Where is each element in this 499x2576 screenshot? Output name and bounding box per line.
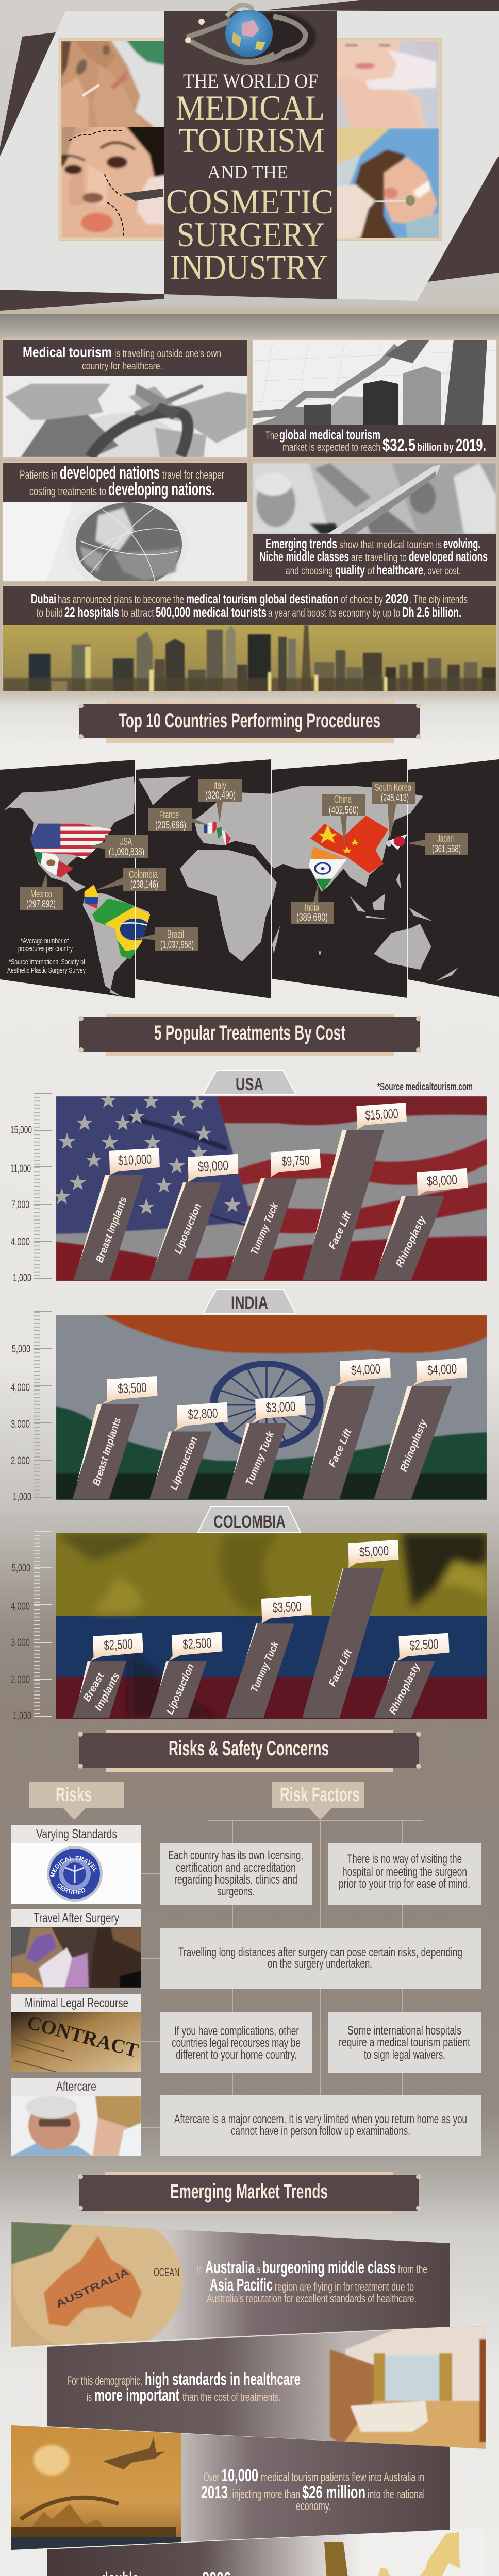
text: developed to developing nations: costing treatments to bbox=[29, 485, 106, 498]
tab: Colombia: COLOMBIA bbox=[213, 1512, 286, 1532]
bars and price tags: India bbox=[73, 1358, 467, 1499]
callout tails bbox=[41, 802, 425, 940]
text band bbox=[253, 534, 496, 581]
callout: Brazil: (1,037,958) bbox=[160, 939, 194, 951]
ruler axis: 7,000 bbox=[11, 1199, 29, 1211]
risks tab bbox=[29, 1782, 124, 1820]
text: market forecast: $32.5 bbox=[382, 435, 415, 454]
map flags bbox=[29, 802, 425, 960]
text: developed to developing nations: developed nations bbox=[60, 463, 160, 483]
text: For this demographic, bbox=[67, 2374, 142, 2388]
tab: Colombia bbox=[198, 1507, 301, 1532]
photo: injection in face bbox=[61, 41, 164, 127]
tab: USA: USA bbox=[236, 1075, 263, 1094]
text: burgeoning middle class bbox=[262, 2258, 396, 2277]
callout: Italy: (320,490) bbox=[205, 790, 236, 801]
bar: Rhinoplasty bbox=[374, 1633, 450, 1718]
bar and price labels: India: Liposuction bbox=[168, 1435, 200, 1492]
bar: Liposuction bbox=[149, 1632, 222, 1718]
title line: THE WORLD OF bbox=[183, 70, 318, 92]
text: Dubai plans: to attract bbox=[121, 606, 154, 619]
tab: India: INDIA bbox=[231, 1293, 268, 1313]
callout: India: (389,680) bbox=[296, 912, 328, 923]
bar and price labels: USA: $10,000 bbox=[118, 1151, 152, 1168]
text: medical tourism definition: is travelling outside one's own bbox=[114, 348, 221, 360]
text: Australia bbox=[205, 2258, 255, 2277]
text: market forecast: The bbox=[265, 429, 278, 442]
bar: Face Lift bbox=[302, 1358, 391, 1499]
text: Dubai plans: 22 hospitals bbox=[64, 604, 119, 620]
map notes bbox=[7, 937, 86, 975]
text: Dubai plans: a year and boost its economy by up to bbox=[268, 606, 400, 619]
banner bbox=[11, 2222, 450, 2347]
panel frame bbox=[2, 338, 248, 459]
shadow band below header bbox=[0, 314, 499, 338]
flag: USA bbox=[30, 823, 111, 859]
bar and price labels: USA: Breast Implants bbox=[94, 1195, 129, 1264]
header bbox=[0, 0, 499, 311]
factor: visiting bbox=[328, 1843, 481, 1905]
text: 2013 bbox=[201, 2483, 228, 2502]
text: , injecting more than bbox=[228, 2487, 300, 2501]
risk: aftercare: Aftercare bbox=[56, 2079, 96, 2094]
heading: 5 popular treatments: 5 Popular Treatments By Cost bbox=[154, 1022, 345, 1044]
image: Sydney sunset with plane bbox=[11, 2421, 181, 2555]
bar and price labels: Colombia: Tummy Tuck bbox=[248, 1639, 281, 1694]
text: emerging trends detail: , over cost. bbox=[423, 565, 461, 577]
title line: MEDICAL bbox=[176, 88, 325, 127]
tab: India bbox=[203, 1289, 296, 1313]
text: Dubai plans: Dh 2.6 billion. bbox=[402, 604, 461, 620]
bar and price labels: Colombia: Liposuction bbox=[164, 1662, 196, 1716]
map notes: *Average number of bbox=[21, 937, 69, 945]
bar: Breast Implants bbox=[73, 1633, 143, 1718]
factor: complications: If you have complications, other bbox=[174, 2024, 299, 2038]
callout: Colombia: Colombia bbox=[129, 869, 158, 880]
text: market forecast: billion by bbox=[417, 440, 454, 453]
text: emerging trends detail bbox=[259, 536, 488, 578]
bar and price labels: Colombia: $5,000 bbox=[359, 1543, 389, 1560]
text: emerging trends detail: and choosing bbox=[286, 565, 333, 577]
flag photo: USA bbox=[56, 1096, 487, 1281]
title text bbox=[166, 70, 334, 286]
text: emerging trends detail: healthcare bbox=[376, 562, 423, 578]
map notes: procedures per country bbox=[18, 944, 73, 953]
text: is bbox=[87, 2391, 92, 2403]
factor: licensing: Each country has its own licensing, bbox=[168, 1849, 303, 1862]
image: Dubai skyline bbox=[3, 625, 496, 691]
bar and price labels: USA: $9,750 bbox=[281, 1153, 310, 1169]
risks tab: Risks bbox=[56, 1784, 92, 1806]
bar and price labels: India: $3,500 bbox=[118, 1380, 147, 1396]
fold gaps bbox=[136, 757, 407, 999]
text bbox=[67, 2369, 301, 2404]
bar and price labels: India: Face Lift bbox=[327, 1427, 354, 1469]
flag: China bbox=[309, 815, 390, 874]
ruler axis: 1,000 bbox=[13, 1272, 31, 1284]
map notes: *Source International Society of bbox=[9, 958, 86, 967]
image: contract document: CONTRACT bbox=[25, 2011, 141, 2062]
callout: China: China bbox=[334, 794, 352, 805]
ruler axis: 11,000 bbox=[10, 1163, 31, 1175]
risk factor boxes bbox=[160, 1843, 481, 2156]
chart: India bbox=[11, 1289, 487, 1503]
bar and price labels: USA: $8,000 bbox=[426, 1172, 458, 1189]
ruler axis: 1,000 bbox=[13, 1491, 31, 1503]
ruler axis bbox=[11, 1531, 52, 1722]
ruler axis bbox=[11, 1312, 52, 1503]
text: economy. bbox=[296, 2499, 331, 2513]
heading: top 10 countries bbox=[78, 701, 421, 743]
text: emerging trends detail: Emerging trends bbox=[265, 536, 337, 551]
map notes: Aesthetic Plastic Surgery Survey bbox=[7, 966, 86, 975]
map continents bbox=[3, 776, 458, 996]
panel frame bbox=[252, 461, 497, 582]
title panel bbox=[164, 11, 337, 299]
trend 4: double the number bbox=[47, 2532, 460, 2576]
flag: Italy bbox=[217, 827, 231, 845]
callout: Brazil: Brazil bbox=[167, 929, 184, 940]
callout: South Korea bbox=[372, 782, 415, 804]
heading: emerging market trends bbox=[78, 2172, 421, 2214]
factor: legal waivers bbox=[328, 2012, 481, 2073]
trend 2: high standards bbox=[47, 2326, 486, 2449]
text: Dubai plans bbox=[31, 591, 468, 620]
image: rising bar chart bbox=[253, 340, 496, 425]
text: Dubai plans: to build bbox=[37, 606, 63, 619]
bar and price labels: Colombia: Face Lift bbox=[327, 1647, 355, 1688]
text: Dubai plans: 2020 bbox=[385, 591, 408, 606]
banner bbox=[11, 2425, 450, 2550]
image: globe showing Australia: OCEAN bbox=[154, 2266, 179, 2279]
text: market forecast: global medical tourism bbox=[279, 427, 380, 443]
text: market forecast bbox=[265, 427, 486, 454]
panel: emerging trends bbox=[252, 461, 497, 582]
risk: travel after surgery: Travel After Surgery bbox=[34, 1911, 119, 1925]
text band bbox=[253, 425, 496, 457]
factor: aftercare bbox=[160, 2095, 481, 2156]
text band bbox=[3, 463, 247, 502]
risk: varying standards bbox=[11, 1825, 141, 1904]
text: In bbox=[196, 2263, 203, 2276]
callout: Japan: (361,568) bbox=[432, 843, 461, 855]
callout: Japan bbox=[425, 833, 468, 855]
image: rising gold arrow chart bbox=[324, 2532, 460, 2576]
ruler axis: 4,000 bbox=[11, 1236, 30, 1248]
heading: risks and safety bbox=[78, 1730, 421, 1772]
text: than the cost of treatments. bbox=[182, 2391, 281, 2403]
bar and price labels: Colombia: $2,500 bbox=[182, 1635, 212, 1652]
text: Dubai plans: 500,000 medical tourists bbox=[156, 604, 267, 620]
text: $26 million bbox=[302, 2483, 365, 2502]
ruler axis: 4,000 bbox=[11, 1601, 30, 1613]
icon: medical travel certified seal: CERTIFIED bbox=[57, 1884, 86, 1894]
flag: France bbox=[204, 822, 217, 834]
bar: Tummy Tuck bbox=[226, 1595, 312, 1718]
text: 10,000 bbox=[221, 2466, 258, 2485]
ruler axis: 5,000 bbox=[12, 1343, 30, 1355]
text: emerging trends detail: show that medical tourism is bbox=[339, 539, 442, 551]
panel frame bbox=[252, 338, 497, 459]
flag: Colombia bbox=[85, 885, 99, 909]
factor: complications bbox=[160, 2012, 312, 2073]
photo: face with surgical marks bbox=[61, 127, 164, 238]
factor: licensing bbox=[160, 1843, 312, 1905]
callout: USA bbox=[105, 835, 148, 858]
bar and price labels: USA: Face Lift bbox=[327, 1209, 354, 1251]
bar and price labels: USA: Rhinoplasty bbox=[394, 1214, 428, 1269]
bars and price tags: USA bbox=[73, 1103, 468, 1280]
text: developed to developing nations: travel for cheaper bbox=[162, 468, 224, 481]
callout: France: France bbox=[159, 809, 179, 821]
risk factors tab: Risk Factors bbox=[280, 1784, 360, 1806]
callout: Colombia: (238,146) bbox=[130, 879, 158, 890]
text: emerging trends detail: Niche middle classes bbox=[259, 549, 349, 564]
text: more important bbox=[94, 2385, 179, 2404]
tab: USA bbox=[203, 1071, 296, 1094]
title line: TOURISM bbox=[178, 121, 325, 160]
risk: aftercare bbox=[11, 2078, 141, 2156]
text: market forecast: 2019. bbox=[456, 435, 486, 454]
bar and price labels: USA: $9,000 bbox=[197, 1157, 229, 1175]
callout: South Korea: (248,413) bbox=[381, 792, 409, 804]
ruler axis: 4,000 bbox=[11, 1382, 30, 1394]
risk: minimal legal recourse bbox=[11, 1994, 141, 2072]
factor: complications: countries legal recourses may be bbox=[172, 2036, 301, 2050]
bar and price labels: India: Tummy Tuck bbox=[243, 1430, 277, 1487]
bar: Rhinoplasty bbox=[374, 1358, 467, 1499]
ruler axis: 1,000 bbox=[13, 1710, 31, 1722]
trend 3: patient numbers bbox=[11, 2421, 450, 2555]
title line: SURGERY bbox=[177, 215, 325, 254]
title line: AND THE bbox=[207, 162, 288, 182]
callout: India bbox=[291, 902, 334, 924]
panel frame bbox=[2, 585, 497, 692]
image: globe showing Australia: AUSTRALIA bbox=[54, 2266, 131, 2311]
callout: Colombia bbox=[123, 868, 166, 891]
flag photo: Colombia bbox=[56, 1533, 487, 1719]
bar and price labels: India: $4,000 bbox=[351, 1361, 381, 1378]
callout: Italy bbox=[198, 779, 242, 802]
bar and price labels: India bbox=[91, 1361, 457, 1492]
text bbox=[201, 2466, 425, 2513]
callout: South Korea: South Korea bbox=[375, 782, 412, 793]
ruler axis: 5,000 bbox=[12, 1562, 30, 1574]
text: Dubai plans: of choice by bbox=[341, 592, 383, 606]
text: developed to developing nations bbox=[20, 463, 224, 499]
bar: Tummy Tuck bbox=[226, 1149, 321, 1280]
bar and price labels: Colombia: $2,500 bbox=[104, 1636, 133, 1653]
bar: Face Lift bbox=[302, 1540, 398, 1718]
text: into the national bbox=[368, 2487, 425, 2501]
world map: top 10 countries bbox=[0, 757, 499, 999]
text: market forecast: market is expected to reach bbox=[282, 442, 380, 453]
risk: travel after surgery bbox=[11, 1909, 141, 1988]
text: emerging trends detail: of bbox=[367, 565, 375, 577]
factor: licensing: certification and accreditation bbox=[176, 1861, 296, 1875]
text: Dubai plans: . The city intends bbox=[409, 592, 468, 606]
factor: aftercare: cannot have in person follow up examinations. bbox=[231, 2124, 410, 2138]
heading: emerging market trends: Emerging Market Trends bbox=[170, 2180, 328, 2203]
bar and price labels: Colombia: Implants bbox=[93, 1671, 122, 1713]
bar and price labels: India: $2,800 bbox=[188, 1405, 218, 1422]
heading: 5 popular treatments bbox=[78, 1014, 421, 1056]
text: Dubai plans: Dubai bbox=[31, 591, 56, 606]
flag photo: India bbox=[56, 1315, 487, 1500]
bar and price labels: Colombia: $2,500 bbox=[409, 1636, 439, 1653]
callout: Italy: Italy bbox=[213, 780, 226, 791]
bar and price labels: USA: Tummy Tuck bbox=[248, 1201, 281, 1257]
flag: Japan bbox=[388, 834, 407, 850]
callout: Mexico: Mexico bbox=[30, 889, 52, 900]
bar and price labels: USA bbox=[94, 1106, 458, 1269]
icon: medical travel certified seal: MEDICAL TRAVEL bbox=[50, 1856, 97, 1877]
text: medical tourism definition: country for healthcare. bbox=[82, 361, 162, 372]
photo frame bbox=[59, 38, 442, 241]
text: Over bbox=[204, 2470, 219, 2484]
text: developed to developing nations: developing nations. bbox=[108, 480, 215, 499]
callout: France: (205,696) bbox=[155, 820, 186, 831]
factor: long distance travel: on the surgery undertaken. bbox=[268, 1957, 372, 1971]
text: Dubai plans: has announced plans to become the bbox=[58, 592, 184, 606]
callout: USA: USA bbox=[119, 836, 132, 848]
image: hospital room bbox=[330, 2326, 486, 2449]
bar and price labels: Colombia bbox=[81, 1543, 439, 1716]
ruler axis bbox=[10, 1093, 52, 1284]
risk: varying standards: Varying Standards bbox=[36, 1827, 117, 1841]
chart: USA bbox=[10, 1071, 487, 1284]
icon: globe with stethoscope bbox=[185, 5, 316, 63]
factor: legal waivers: to sign legal waivers. bbox=[364, 2048, 445, 2062]
bar and price labels: India: $3,000 bbox=[265, 1399, 296, 1416]
bar and price labels: USA: Liposuction bbox=[172, 1202, 204, 1256]
bar: Rhinoplasty bbox=[374, 1168, 468, 1280]
text: Dubai plans: medical tourism global destination bbox=[186, 591, 339, 606]
flag: Brazil bbox=[91, 897, 151, 960]
bar and price labels: USA: $15,000 bbox=[365, 1106, 398, 1123]
ruler axis: 3,000 bbox=[11, 1418, 30, 1430]
callout: Japan: Japan bbox=[437, 833, 454, 844]
callout: China: (402,560) bbox=[329, 805, 359, 816]
bar: Breast Implants bbox=[73, 1376, 158, 1499]
bar and price labels: India: Breast Implants bbox=[91, 1416, 123, 1487]
text: from the bbox=[398, 2263, 427, 2276]
text band bbox=[3, 340, 247, 376]
bar: Breast Implants bbox=[73, 1148, 160, 1280]
photo: patient at dentist bbox=[337, 128, 439, 238]
ruler axis: 2,000 bbox=[11, 1455, 30, 1467]
image: globe showing Australia bbox=[11, 2222, 183, 2347]
callout: China bbox=[322, 794, 365, 816]
bar: Liposuction bbox=[149, 1402, 228, 1499]
image: globe coin bbox=[3, 502, 247, 581]
factor: complications: different to your home country. bbox=[176, 2048, 297, 2062]
text bbox=[196, 2258, 427, 2305]
factor: licensing: regarding hospitals, clinics and bbox=[174, 1873, 297, 1887]
panel: Dubai bbox=[2, 585, 497, 692]
image: doctor with senior patient bbox=[11, 2096, 141, 2156]
bar and price labels: Colombia: Breast bbox=[81, 1670, 107, 1703]
text: Australia's reputation for excellent standards of healthcare. bbox=[207, 2292, 417, 2305]
image: surgeon with mask bbox=[11, 1927, 141, 1988]
panel: market growth bbox=[252, 338, 497, 459]
chart: Colombia bbox=[11, 1507, 487, 1722]
factor: long distance travel bbox=[160, 1928, 481, 1989]
photo: woman receiving facial treatment bbox=[337, 41, 439, 128]
bars and price tags: Colombia bbox=[73, 1540, 450, 1718]
header: light angled panel bbox=[0, 11, 499, 301]
ruler axis: 3,000 bbox=[11, 1637, 30, 1649]
bar and price labels: Colombia: Rhinoplasty bbox=[387, 1661, 423, 1716]
callout: India: India bbox=[305, 902, 320, 913]
icon: medical travel certified seal bbox=[47, 1846, 103, 1902]
text: a bbox=[256, 2263, 260, 2276]
text: high standards in healthcare bbox=[145, 2369, 301, 2388]
banner bbox=[47, 2326, 486, 2449]
image: world map with plane bbox=[3, 376, 247, 457]
callout: USA: (1,090,838) bbox=[109, 846, 144, 858]
flag: Mexico bbox=[34, 851, 73, 878]
bar and price labels: Colombia: $3,500 bbox=[272, 1599, 302, 1615]
panel: what is medical tourism bbox=[2, 338, 248, 576]
callout: France bbox=[148, 808, 192, 831]
ruler axis: 15,000 bbox=[10, 1124, 32, 1136]
factor: legal waivers: Some international hospitals bbox=[347, 2024, 461, 2038]
factor: licensing: surgeons. bbox=[217, 1885, 255, 1899]
text: Asia Pacific bbox=[210, 2275, 273, 2294]
text: emerging trends detail: quality bbox=[335, 562, 365, 578]
text bbox=[70, 2569, 294, 2576]
header: dark angled shapes bbox=[0, 0, 499, 311]
image: plane on banknotes bbox=[253, 463, 496, 534]
title line: COSMETIC bbox=[166, 182, 334, 221]
callout: Mexico bbox=[20, 887, 63, 910]
map fold panels bbox=[0, 759, 499, 998]
risk: minimal legal recourse: Minimal Legal Recourse bbox=[25, 1996, 128, 2010]
text: medical tourism definition: Medical tourism bbox=[23, 344, 112, 360]
heading: risks and safety: Risks & Safety Concerns bbox=[169, 1737, 329, 1760]
callout: Mexico: (297,892) bbox=[26, 899, 56, 910]
banner bbox=[47, 2528, 486, 2576]
text: medical tourism definition bbox=[23, 344, 221, 372]
text: developed to developing nations: Patients in bbox=[20, 468, 58, 481]
text: region are flying in for treatment due to bbox=[275, 2280, 414, 2293]
bar and price labels: India: Rhinoplasty bbox=[398, 1418, 429, 1473]
bar: Liposuction bbox=[149, 1154, 238, 1280]
risk factors tab bbox=[272, 1782, 364, 1820]
panel: developed nations bbox=[2, 461, 248, 592]
callout: Brazil bbox=[155, 927, 198, 951]
bar and price labels: India: $4,000 bbox=[427, 1361, 457, 1378]
bar: Face Lift bbox=[302, 1103, 407, 1280]
text band bbox=[3, 586, 496, 625]
ruler axis: 2,000 bbox=[11, 1674, 30, 1686]
flag: South Korea bbox=[386, 840, 391, 847]
text: emerging trends detail: are travelling to bbox=[351, 552, 407, 564]
flag: India bbox=[308, 846, 347, 891]
panel frame bbox=[2, 461, 248, 582]
trend 1: Australia bbox=[11, 2222, 450, 2347]
title line: INDUSTRY bbox=[170, 247, 328, 286]
bar: Tummy Tuck bbox=[226, 1396, 306, 1499]
